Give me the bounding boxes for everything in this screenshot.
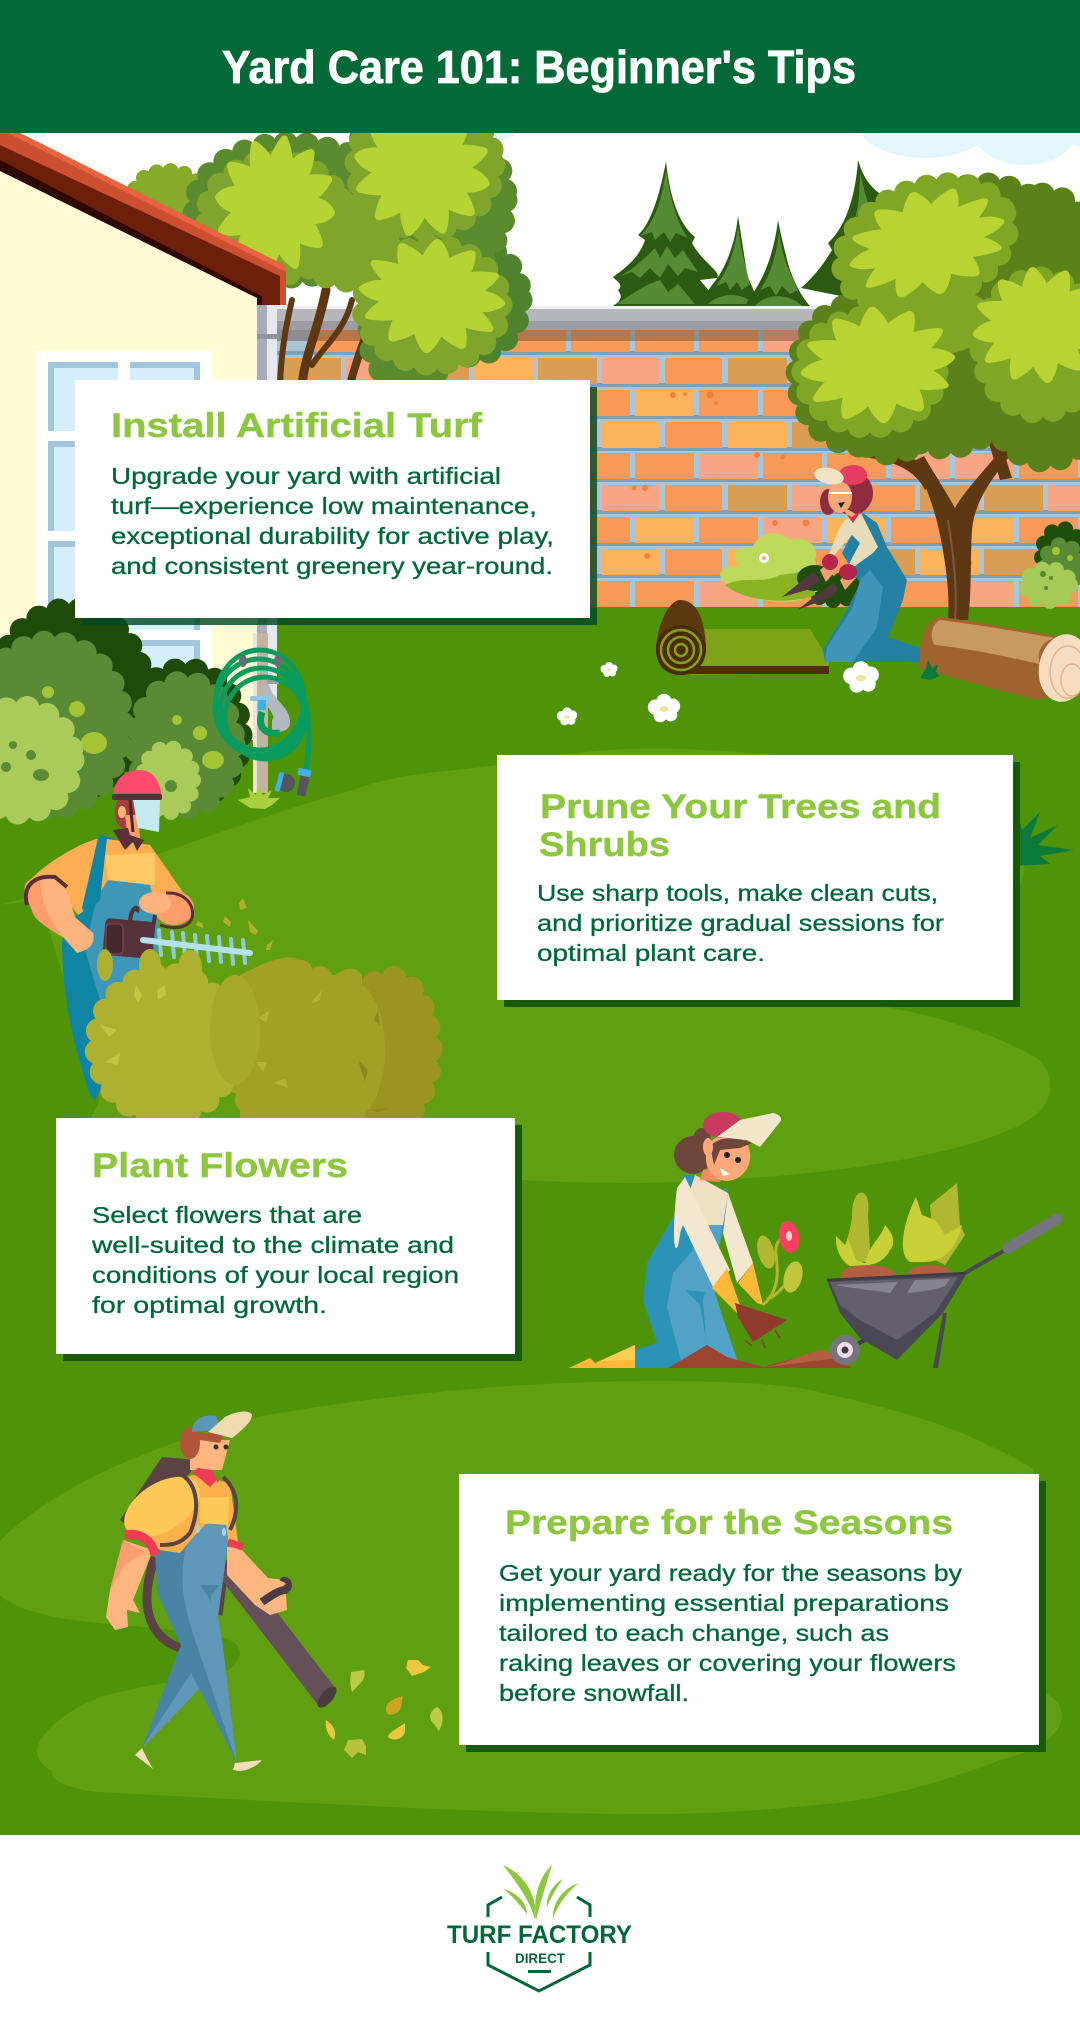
card 3 heading: Plant Flowers bbox=[92, 1147, 348, 1185]
right tree trunk bbox=[870, 440, 1018, 620]
roof bbox=[0, 123, 286, 305]
logo hexagon frame bbox=[488, 1897, 590, 1991]
shoes bbox=[135, 1748, 153, 1769]
overalls bbox=[635, 1175, 740, 1368]
card 3 body: for optimal growth. bbox=[92, 1292, 327, 1318]
title: Yard Care 101: Beginner's Tips bbox=[222, 41, 856, 93]
window bbox=[36, 351, 212, 741]
hedge trimmer bbox=[102, 908, 250, 964]
first gardener laying turf bbox=[782, 465, 920, 662]
front body bbox=[155, 1490, 237, 1763]
logo grass blades bbox=[503, 1865, 579, 1920]
card 4 body: Get your yard ready for the seasons by bbox=[499, 1560, 962, 1586]
footer band bbox=[0, 1835, 1080, 2040]
hose nozzle bbox=[275, 768, 311, 797]
brick wall bbox=[277, 306, 1080, 607]
card 4: prepare for the seasons bbox=[459, 1474, 1046, 1752]
card 2 heading: Prune Your Trees and bbox=[540, 788, 941, 826]
card 1 body: Upgrade your yard with artificial bbox=[111, 463, 501, 489]
wall top cap bbox=[277, 306, 1080, 341]
card 2 heading: Shrubs bbox=[539, 826, 670, 864]
card 1 body: turf—experience low maintenance, bbox=[111, 493, 537, 519]
card 1 heading: Install Artificial Turf bbox=[111, 407, 483, 445]
potted flower bbox=[735, 1220, 806, 1348]
daisies bbox=[557, 661, 879, 725]
right arm and hand bbox=[227, 1547, 287, 1615]
grass sprout bbox=[920, 660, 940, 680]
card 1 body bbox=[111, 463, 554, 579]
header band bbox=[0, 0, 1080, 133]
tree: right bbox=[798, 162, 1080, 620]
drain pipe bbox=[253, 305, 290, 793]
card 3 body: well-suited to the climate and bbox=[91, 1232, 454, 1258]
card 2 heading bbox=[539, 788, 941, 864]
head bbox=[674, 1112, 781, 1186]
head bbox=[180, 1411, 252, 1487]
card 2 body: Use sharp tools, make clean cuts, bbox=[537, 880, 938, 906]
arms bbox=[25, 877, 94, 953]
card 4 body: tailored to each change, such as bbox=[499, 1620, 889, 1646]
clouds bbox=[26, 92, 1080, 165]
tree: left, behind wall corner bbox=[134, 95, 520, 385]
card 2: prune your trees and shrubs bbox=[497, 755, 1020, 1007]
third gardener planting flowers bbox=[569, 1112, 1057, 1368]
house wall bbox=[0, 171, 257, 741]
card 1: install artificial turf bbox=[75, 380, 597, 625]
card 1 body: and consistent greenery year-round. bbox=[111, 553, 553, 579]
torso and arms bbox=[690, 1175, 728, 1225]
left arm bbox=[106, 1540, 153, 1630]
head bbox=[112, 770, 162, 851]
fourth gardener with leaf blower bbox=[106, 1411, 442, 1771]
left tree trunks bbox=[280, 290, 372, 385]
card 3 body: conditions of your local region bbox=[92, 1262, 459, 1288]
logo wordmark: TURF FACTORY bbox=[447, 1921, 632, 1949]
pine trees bbox=[613, 160, 890, 306]
left tree foliage bbox=[134, 95, 520, 385]
blown leaves bbox=[326, 1660, 442, 1758]
card 2 body: and prioritize gradual sessions for bbox=[537, 910, 944, 936]
bush: right of wall bbox=[1026, 529, 1080, 601]
shirt bbox=[30, 838, 185, 915]
card 3: plant flowers bbox=[56, 1118, 522, 1361]
card 3 body bbox=[91, 1202, 459, 1318]
logo: turf factory direct bbox=[447, 1865, 632, 1991]
small grass tuft bbox=[238, 786, 280, 809]
buttons and pocket mark bbox=[200, 1585, 220, 1602]
card 4 body bbox=[499, 1560, 962, 1706]
grass tuft right bbox=[1013, 795, 1074, 866]
lawn hill: lower bbox=[0, 1381, 1062, 1814]
turf roll bbox=[656, 600, 829, 675]
soil mound bbox=[668, 1345, 852, 1368]
bushes: left bbox=[0, 610, 240, 812]
garden hose bbox=[214, 650, 313, 809]
lawn base bbox=[0, 607, 1080, 1835]
hedge bbox=[97, 949, 430, 1128]
vegetables bbox=[836, 1183, 965, 1285]
second gardener trimming hedge bbox=[25, 770, 273, 1100]
wooden log bbox=[920, 617, 1080, 706]
card 2 body bbox=[537, 880, 944, 966]
wheelbarrow bbox=[827, 1183, 1057, 1368]
lawn hill: upper bbox=[0, 748, 1050, 1183]
flying leaves bbox=[196, 898, 273, 950]
leaf blower tube bbox=[227, 1567, 340, 1711]
hose bbox=[147, 1557, 180, 1648]
logo subtitle: DIRECT bbox=[515, 1950, 565, 1966]
card 4 body: before snowfall. bbox=[499, 1680, 689, 1706]
card 4 heading: Prepare for the Seasons bbox=[505, 1504, 953, 1542]
card 4 body: implementing essential preparations bbox=[499, 1590, 949, 1616]
card 2 body: optimal plant care. bbox=[537, 940, 765, 966]
gloves bbox=[712, 1263, 763, 1328]
card 3 body: Select flowers that are bbox=[92, 1202, 362, 1228]
card 1 body: exceptional durability for active play, bbox=[111, 523, 554, 549]
boots bbox=[569, 1345, 635, 1368]
card 4 body: raking leaves or covering your flowers bbox=[499, 1650, 956, 1676]
sky background bbox=[0, 133, 1080, 613]
bush: behind first gardener bbox=[720, 533, 857, 602]
backpack bbox=[120, 1457, 197, 1530]
overalls bbox=[62, 835, 158, 1100]
shirt bbox=[130, 1475, 238, 1553]
right tree foliage bbox=[798, 162, 1080, 460]
back leg bbox=[142, 1647, 200, 1748]
